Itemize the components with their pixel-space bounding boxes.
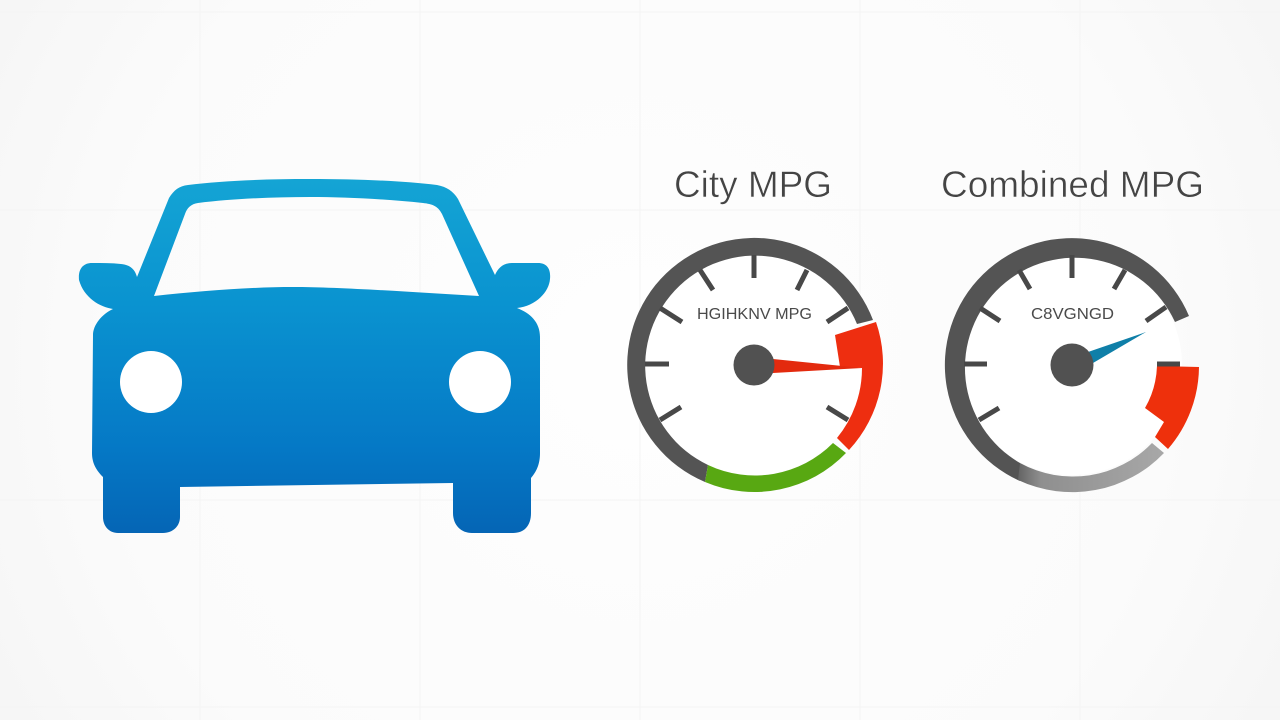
gauge tick marks	[645, 255, 848, 420]
headlight: right	[449, 351, 511, 413]
gauge label: HGIHKNV MPG	[697, 306, 812, 323]
gauge needle	[773, 359, 862, 373]
gauge red zone	[1145, 366, 1199, 449]
icon: blue car front view	[79, 179, 550, 533]
gauge green zone	[705, 443, 846, 492]
gauge dark arc	[945, 238, 1189, 481]
gauge hub	[734, 344, 774, 386]
gauge hub	[1050, 344, 1094, 386]
gauge needle	[1088, 332, 1146, 363]
gauge tick marks	[964, 255, 1180, 420]
gauge dial face	[962, 255, 1182, 475]
gauge dial face	[644, 255, 864, 475]
gauge dark arc	[627, 238, 873, 482]
headlight: left	[120, 351, 182, 413]
gauge red zone	[835, 322, 883, 450]
heading: City MPG: City MPG	[674, 164, 832, 205]
gauge: city MPG	[627, 238, 883, 492]
gauge label: C8VGNGD	[1031, 306, 1114, 323]
heading: Combined MPG: Combined MPG	[941, 164, 1204, 205]
gauge: combined MPG	[945, 238, 1199, 492]
gauge gray zone	[1018, 443, 1164, 492]
